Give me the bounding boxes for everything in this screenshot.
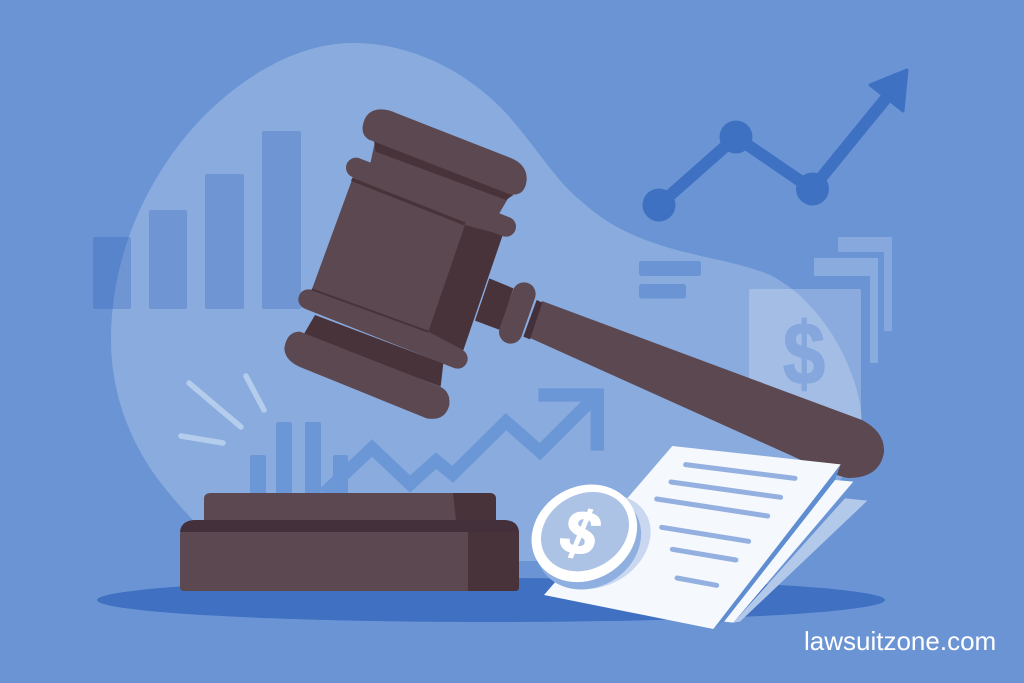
bar chart: large rising bars — [93, 131, 301, 309]
icon: dollar sign on document: $ — [783, 306, 825, 403]
paper stack — [544, 446, 867, 629]
line chart: top right trend with arrow — [642, 70, 907, 222]
icon: dollar coin: $ — [555, 496, 605, 571]
middle sheet — [724, 480, 853, 623]
sound block base — [180, 493, 519, 591]
icon: stacked money documents — [749, 237, 892, 429]
small legend bars — [639, 261, 701, 298]
gavel upper neck — [370, 142, 510, 215]
gavel top cap — [363, 109, 527, 195]
gavel bottom cap — [284, 332, 449, 419]
gavel neck — [475, 278, 513, 330]
gavel lower collar — [308, 299, 458, 359]
gavel — [284, 109, 884, 478]
gavel handle collar — [511, 294, 524, 332]
sheet gap — [713, 464, 841, 629]
gavel lower band — [303, 315, 443, 387]
gavel upper collar — [356, 168, 506, 227]
icon: dollar coin — [514, 466, 668, 608]
gavel head body — [312, 172, 503, 356]
zigzag growth arrow — [323, 395, 597, 494]
document text lines — [657, 465, 795, 585]
front sheet — [544, 446, 841, 629]
impact spark lines — [181, 376, 264, 443]
gavel handle — [530, 301, 884, 478]
ground shadow ellipse — [97, 578, 885, 622]
website label: lawsuitzone.com — [804, 626, 996, 656]
background blob — [111, 43, 862, 561]
small bars behind the zigzag — [250, 422, 348, 495]
back sheet — [733, 498, 867, 623]
